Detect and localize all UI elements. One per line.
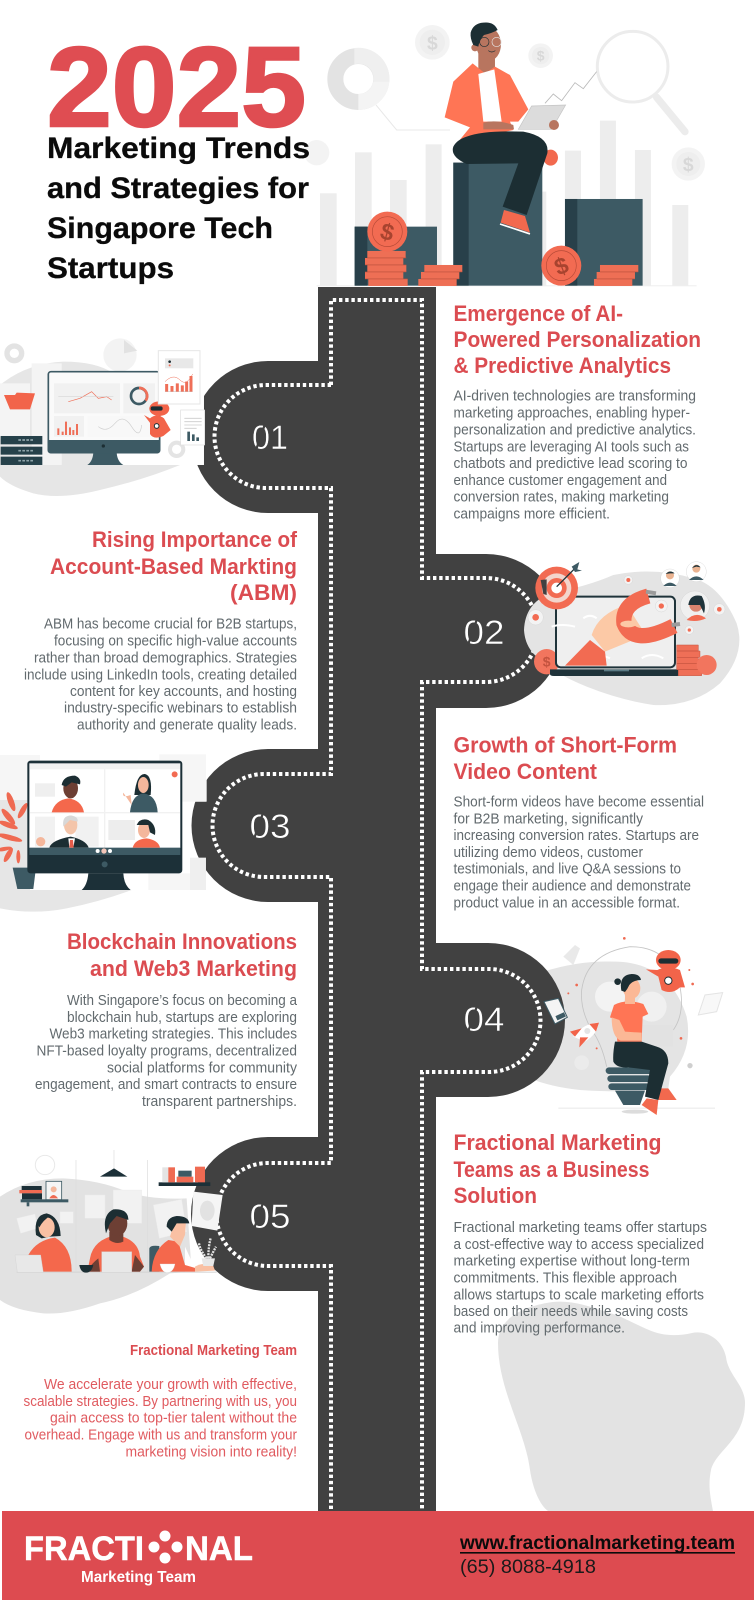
body text: commitments. This flexible approach <box>454 1270 677 1286</box>
body text: Startups are leveraging AI tools such as <box>454 439 689 455</box>
orange dollar coins: $ <box>551 252 572 280</box>
gray dollar coins: $ <box>683 155 694 176</box>
heading <box>50 527 298 605</box>
coin stacks <box>365 251 638 286</box>
monitor <box>27 761 182 890</box>
body text: based on their needs while saving costs <box>454 1304 688 1320</box>
panel: trend 5 <box>454 1130 707 1337</box>
blob <box>0 362 180 496</box>
pot <box>13 868 36 889</box>
heading: & Predictive Analytics <box>454 353 671 378</box>
man <box>445 22 566 234</box>
body text: include using LinkedIn tools, creating detailed <box>24 667 297 683</box>
body text: blockchain hub, startups are exploring <box>67 1010 297 1026</box>
heading: and Web3 Marketing <box>90 956 297 981</box>
background bars <box>320 121 688 286</box>
illustration: woman on light bulb with robot <box>544 937 723 1115</box>
potted plant <box>199 1238 216 1266</box>
caller 2 <box>123 774 158 812</box>
target <box>535 562 582 609</box>
body text <box>24 617 297 734</box>
panel: trend 1 <box>454 301 701 522</box>
left shelf with books <box>19 1181 68 1206</box>
bulb outline <box>581 947 681 1067</box>
trousers <box>453 131 548 215</box>
shoe <box>501 210 530 233</box>
subtitle <box>47 132 310 285</box>
body text <box>24 1377 297 1460</box>
gray dollar coins <box>304 25 705 181</box>
left coin: $ <box>543 654 551 670</box>
body text <box>454 389 696 522</box>
body text: and improving performance. <box>454 1321 625 1337</box>
hero illustration: man on chart with laptop <box>304 22 705 286</box>
title <box>47 24 310 285</box>
body text <box>454 795 704 911</box>
number 04: 04 <box>464 1001 504 1039</box>
body text: marketing vision into reality! <box>126 1444 297 1460</box>
white backdrop <box>117 350 204 465</box>
folder <box>4 393 35 409</box>
logo: FRACTI <box>24 1530 144 1568</box>
body text: marketing expertise without long-term <box>454 1254 690 1270</box>
hands <box>483 121 514 129</box>
right shelf with books <box>159 1167 210 1186</box>
body text: scalable strategies. By partnering with us, you <box>24 1394 297 1410</box>
body text: overhead. Engage with us and transform your <box>24 1427 297 1443</box>
faint backdrop wall <box>0 754 206 890</box>
body text: engage their audience and demonstrate <box>454 879 691 895</box>
panel: about Fractional Marketing Team <box>24 1343 297 1460</box>
body text: chatbots and predictive lead scoring to <box>454 456 688 472</box>
body text: Short-form videos have become essential <box>454 795 704 811</box>
subtitle: Marketing Trends <box>47 132 310 165</box>
road with five numbered junctions <box>191 287 565 1511</box>
body text: engagement, and smart contracts to ensure <box>35 1077 297 1093</box>
subtitle: Singapore Tech <box>47 212 273 245</box>
panel: trend 2 <box>24 527 298 734</box>
website: www.fractionalmarketing.team <box>459 1533 735 1554</box>
body text: marketing approaches, enabling hyper- <box>454 406 690 422</box>
gear and faint objects <box>563 945 723 1070</box>
faint buildings <box>0 363 62 465</box>
laptop <box>550 597 681 676</box>
subtitle: and Strategies for <box>47 172 309 205</box>
body text: We accelerate your growth with effective, <box>44 1377 297 1393</box>
heading: (ABM) <box>230 580 297 605</box>
heading: Blockchain Innovations <box>67 929 297 954</box>
body text: gain access to top-tier talent without the <box>50 1411 297 1427</box>
wall clock <box>35 1155 55 1175</box>
caller 1 <box>52 776 84 812</box>
body text: NFT-based loyalty programs, decentralized <box>36 1043 297 1059</box>
body text: enhance customer engagement and <box>454 473 667 489</box>
report card <box>158 351 200 404</box>
body text: a cost-effective way to access specialized <box>454 1237 704 1253</box>
caller 4 <box>133 819 160 848</box>
faint pictures <box>17 1190 187 1238</box>
blob <box>524 572 739 705</box>
body text: transparent partnerships. <box>142 1094 297 1110</box>
robot <box>144 401 171 438</box>
heading: Solution <box>454 1183 537 1208</box>
body text: authority and generate quality leads. <box>77 718 297 734</box>
bulb base <box>606 1067 652 1105</box>
growth line <box>545 72 597 103</box>
magnifying glass <box>597 31 685 132</box>
blob <box>0 800 132 912</box>
illustration: three people working at desks <box>0 1150 223 1314</box>
body text: Fractional marketing teams offer startups <box>454 1220 707 1236</box>
illustration: magnet hand on laptop <box>524 562 739 705</box>
orange dollar coins: $ <box>378 218 397 246</box>
illustration blob: trend 4 backdrop <box>530 961 688 1091</box>
caller 3 <box>36 816 89 848</box>
blob <box>0 1178 192 1314</box>
white backdrop cut <box>143 750 207 802</box>
logo: Marketing Team <box>81 1569 196 1586</box>
tee <box>478 69 502 122</box>
server rack <box>1 436 42 465</box>
panel: trend 3 <box>454 733 704 911</box>
body text: utilizing demo videos, customer <box>454 845 643 861</box>
body text: With Singapore’s focus on becoming a <box>67 993 298 1009</box>
body text: for B2B marketing, significantly <box>454 811 644 827</box>
ceiling lamp <box>100 1150 127 1177</box>
red sparkles <box>567 937 694 1049</box>
wall lines <box>76 1160 148 1272</box>
heading <box>67 929 297 981</box>
white cut by the road <box>185 1247 197 1273</box>
body text: Web3 marketing strategies. This includes <box>50 1027 297 1043</box>
body text: focusing on specific high-value accounts <box>54 634 297 650</box>
logo: NAL <box>185 1530 253 1568</box>
illustration: video call monitor <box>0 750 207 912</box>
donut chart <box>335 48 450 130</box>
heading: Rising Importance of <box>92 527 298 552</box>
dark towers <box>355 163 643 286</box>
back foot <box>543 150 558 166</box>
heading: Account-Based Markting <box>50 554 297 579</box>
magnet <box>620 592 680 636</box>
orange dollar coins <box>367 212 581 286</box>
body text: increasing conversion rates. Startups are <box>454 828 699 844</box>
body text <box>454 1220 707 1337</box>
jacket <box>445 63 528 142</box>
body text <box>35 993 298 1110</box>
monitor <box>48 372 160 465</box>
heading: Powered Personalization <box>454 327 701 352</box>
desk line <box>17 1272 217 1273</box>
year: 2025 <box>47 24 306 150</box>
body text: industry-specific webinars to establish <box>64 701 297 717</box>
robot <box>646 950 685 992</box>
heading: Growth of Short-Form <box>454 733 677 758</box>
plant <box>0 791 29 863</box>
gray dollar coins: $ <box>427 33 438 54</box>
illustration: AI dashboard monitor with robot <box>0 338 205 496</box>
heading <box>454 301 701 378</box>
person right <box>149 1216 215 1273</box>
subtitle: Startups <box>47 252 174 285</box>
phone: (65) 8088-4918 <box>460 1557 596 1578</box>
decorative gray blob bottom right <box>498 1302 745 1511</box>
hearts <box>528 576 725 634</box>
number 03: 03 <box>250 808 290 846</box>
body text: AI-driven technologies are transforming <box>454 389 696 405</box>
panel: trend 4 <box>35 929 298 1110</box>
body text: allows startups to scale marketing efforts <box>454 1287 704 1303</box>
heading: Emergence of AI- <box>454 301 623 326</box>
document card <box>181 410 205 445</box>
body text: campaigns more efficient. <box>454 506 610 522</box>
number 01: 01 <box>252 419 288 457</box>
gray dollar coins: $ <box>537 48 545 64</box>
number 02: 02 <box>464 614 504 652</box>
body text: rather than broad demographics. Strategies <box>34 650 297 666</box>
coin stack <box>677 645 717 676</box>
body text: testimonials, and live Q&A sessions to <box>454 862 681 878</box>
heading: Fractional Marketing <box>454 1130 662 1155</box>
person left <box>15 1213 72 1272</box>
heading: Video Content <box>454 759 598 784</box>
arm and hand <box>565 605 642 666</box>
body text: content for key accounts, and hosting <box>70 684 297 700</box>
footer band <box>2 1511 754 1600</box>
heading <box>454 1130 662 1208</box>
ground line <box>558 1108 715 1114</box>
profile circles <box>661 562 710 621</box>
body text: conversion rates, making marketing <box>454 490 669 506</box>
body text: personalization and predictive analytics. <box>454 422 696 438</box>
left coin <box>534 649 559 674</box>
neck and head <box>471 22 501 74</box>
mask poster on road <box>192 1192 223 1231</box>
heading <box>454 733 677 784</box>
rocket <box>570 1023 599 1047</box>
body text: product value in an accessible format. <box>454 895 680 911</box>
body text: ABM has become crucial for B2B startups, <box>44 617 297 633</box>
logo <box>24 1530 253 1586</box>
heading: Teams as a Business <box>454 1157 650 1182</box>
body text: social platforms for community <box>107 1060 298 1076</box>
phone card <box>544 998 567 1024</box>
gray donut and pie <box>7 338 183 456</box>
laptop <box>518 105 566 129</box>
number 05: 05 <box>250 1198 290 1236</box>
person middle <box>79 1209 144 1273</box>
ground line <box>317 284 697 287</box>
woman <box>610 974 677 1115</box>
heading: Fractional Marketing Team <box>130 1343 297 1359</box>
